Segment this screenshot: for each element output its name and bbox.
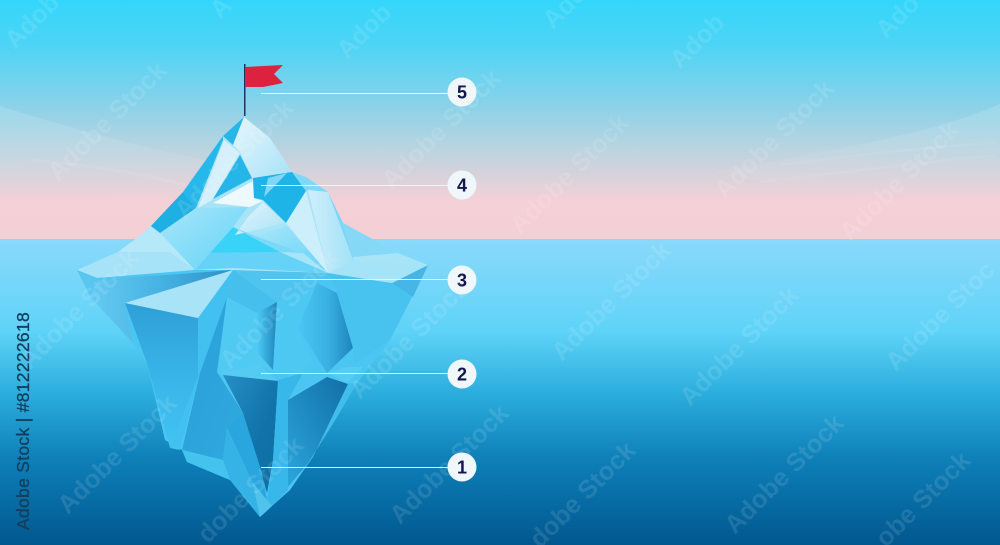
leader line 5 [261,93,451,94]
watermarks: Adobe Stock [546,236,677,366]
waterline ice shelf [77,117,428,318]
sea background [0,239,1000,545]
watermarks: Adobe Stock [709,74,840,204]
number badge 2 [448,360,476,388]
number badge 4: 4 [457,176,467,196]
watermarks: Adobe Stock [42,56,173,186]
number badge 5: 5 [457,82,467,102]
watermarks: Adobe Stoc [880,256,1000,376]
leader line 2 [261,373,451,374]
watermarks: Adobe Stock [344,274,475,404]
flag [244,64,283,116]
watermarks: Adobe Stock [834,116,965,246]
number badge 1 [448,452,476,482]
number badge 2: 2 [457,364,467,384]
iceberg [77,117,428,517]
underwater body [77,265,428,517]
watermarks: Adobe Stock [719,409,850,539]
watermarks: Adobe Stock [384,399,515,529]
peak facets [151,117,354,273]
watermarks: Adobe Stock [14,244,145,374]
watermarks: dobe Stock [192,431,310,545]
watermarks: Adobe Stock [214,244,345,374]
watermarks: Adob [664,8,730,74]
leader line 1 [261,467,451,468]
number badge 3 [448,266,476,294]
watermarks: Adobe Stock [504,109,635,239]
watermarks: Adobe Stock [169,94,300,224]
watermarks: Adobe Stock [52,389,183,519]
leader line 3 [261,279,451,280]
number badge 5 [448,78,476,106]
watermarks: Adobe Stock [376,64,507,194]
right cloud wisps [715,104,1000,205]
number badge 1: 1 [457,458,467,478]
stock id label: Adobe Stock | #812222618 [13,312,33,530]
leader line 4 [261,185,451,186]
number badge 4 [448,170,476,200]
number badge 3: 3 [457,270,467,290]
watermarks: Adob [331,0,397,64]
left cloud wisps [0,106,205,205]
sky background [0,0,1000,239]
watermarks: Adobe Stock [674,281,805,411]
